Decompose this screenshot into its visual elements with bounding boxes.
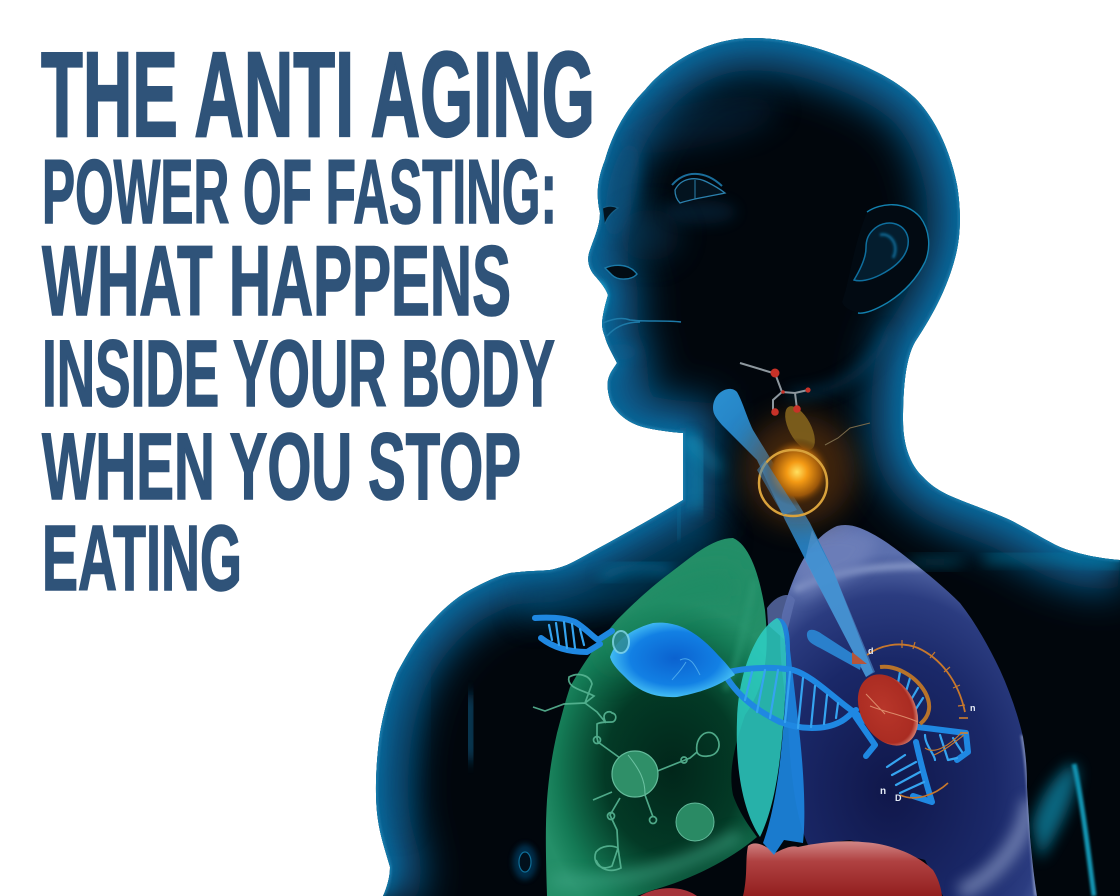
title: WHAT HAPPENS xyxy=(42,225,511,336)
heart and red organs xyxy=(640,841,942,896)
title: INSIDE YOUR BODY xyxy=(42,321,555,427)
chest nipple xyxy=(513,844,537,880)
molecule at throat xyxy=(740,363,811,416)
green molecule core xyxy=(612,751,658,797)
title: POWER OF FASTING: xyxy=(42,142,557,243)
nostril xyxy=(605,265,637,279)
green lung xyxy=(533,538,767,896)
neck and shoulder highlights xyxy=(690,436,699,510)
rim lighting xyxy=(376,38,1120,896)
lips xyxy=(603,319,681,336)
red cell with orange arc: n xyxy=(880,786,886,797)
blue-violet lung xyxy=(767,525,1037,896)
ear xyxy=(842,205,929,313)
title xyxy=(41,26,595,610)
title: EATING xyxy=(42,506,242,610)
eye xyxy=(603,174,725,224)
teal membrane and central blue column xyxy=(737,618,804,855)
green molecule network xyxy=(533,675,719,870)
head and face shading xyxy=(646,92,776,158)
DNA helix xyxy=(535,618,968,802)
red cell with orange arc: D xyxy=(895,793,902,803)
title: THE ANTI AGING xyxy=(41,26,595,162)
blue cell xyxy=(610,623,735,697)
windpipe tube xyxy=(713,389,875,677)
green sphere xyxy=(676,803,714,841)
small white markers: n xyxy=(970,703,976,713)
red cell with orange arc xyxy=(846,640,976,803)
title: WHEN YOU STOP xyxy=(42,414,521,520)
human body silhouette xyxy=(376,38,1120,896)
red cell with orange arc: d xyxy=(868,646,874,656)
right shoulder and arm highlights xyxy=(985,557,1120,566)
glowing thyroid xyxy=(745,402,870,525)
